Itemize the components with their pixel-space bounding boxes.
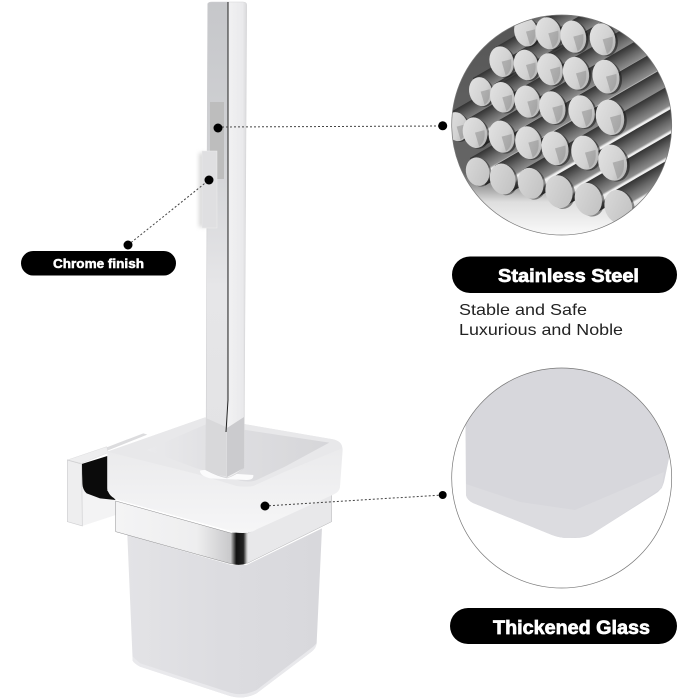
rod bodies: [452, 15, 672, 212]
chrome band: [116, 493, 332, 565]
rod faces: [452, 17, 630, 182]
glass close-up: [466, 368, 670, 538]
wall mount bracket: [67, 433, 147, 526]
bottom row faces: [466, 157, 634, 222]
panel: thickened glass circle: [452, 360, 690, 588]
pill: Thickened Glass: [450, 608, 677, 644]
callout: chrome finish leader: [124, 176, 214, 250]
pill: Chrome finish: Chrome finish: [53, 256, 144, 271]
callout: stainless steel leader: [214, 121, 447, 132]
callout: thickened glass leader: [260, 491, 447, 510]
pill: Stainless Steel: Stainless Steel: [498, 266, 639, 286]
hook clip: [202, 151, 217, 228]
chrome label patch: [210, 102, 224, 179]
glass cup: [127, 528, 322, 697]
product: toilet brush holder: [67, 2, 343, 697]
text block: stainless steel benefits: Luxurious and Noble: [459, 322, 623, 339]
brush handle pole: [199, 2, 247, 478]
text block: stainless steel benefits: Stable and Safe: [459, 302, 587, 319]
pill: Stainless Steel: [452, 256, 677, 293]
text block: stainless steel benefits: [459, 302, 623, 339]
panel: stainless steel rods circle: [451, 14, 672, 236]
pill: Chrome finish: [21, 251, 176, 276]
glass rim: [107, 417, 343, 533]
pill: Thickened Glass: Thickened Glass: [493, 618, 650, 639]
hook clip shadow: [199, 153, 207, 227]
